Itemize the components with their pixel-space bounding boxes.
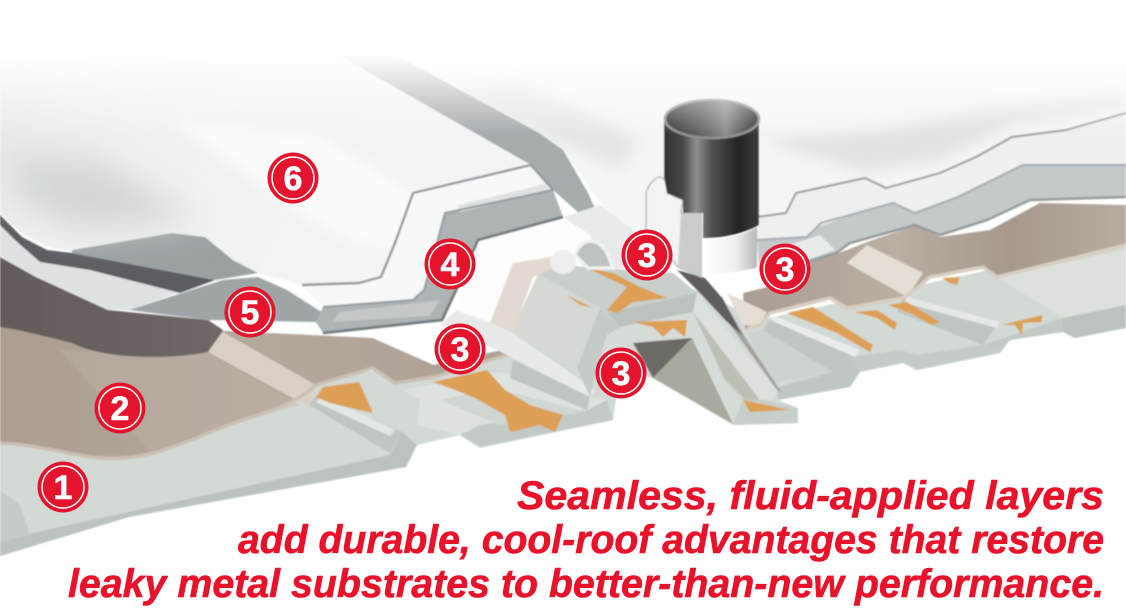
badge 1: 1 bbox=[54, 469, 72, 507]
pipe opening bbox=[665, 100, 759, 138]
badge 3, rib base: 3 bbox=[451, 331, 469, 369]
bolt fastener bbox=[550, 241, 613, 274]
badge 5 bbox=[224, 286, 276, 338]
badge 3, rib base bbox=[434, 324, 486, 374]
white ribbed block under coating bbox=[440, 217, 595, 397]
badge 6 bbox=[268, 152, 318, 204]
white collar bbox=[705, 227, 757, 277]
badge 3, pipe left bbox=[622, 230, 672, 280]
rust on the rib bbox=[567, 268, 790, 412]
central rib face and arch bbox=[513, 265, 798, 425]
right sheet of the coating: top coat bbox=[331, 20, 1126, 230]
badge 5: 5 bbox=[241, 294, 259, 332]
grey seam between sheets bbox=[277, 20, 617, 232]
right sheet: second and third coat bands bbox=[757, 113, 1126, 277]
left coating: dark stripe, lip and grey flaps bbox=[0, 215, 323, 322]
caption: leaky metal substrates to better-than-new performance. bbox=[68, 562, 1104, 606]
wedge beside seam bbox=[563, 205, 640, 272]
rust patches on corrugations bbox=[316, 277, 1042, 432]
badge 3, pipe right: 3 bbox=[776, 251, 794, 289]
badge 3, pipe left: 3 bbox=[638, 237, 656, 275]
white gap behind rib bbox=[373, 323, 470, 365]
caption: add durable, cool-roof advantages that restore bbox=[238, 518, 1104, 562]
badge 2: 2 bbox=[111, 390, 129, 428]
badge 6: 6 bbox=[284, 160, 302, 198]
pipe flashing bbox=[646, 177, 701, 277]
dark shadow under the coating bbox=[0, 257, 223, 357]
caption: Seamless, fluid-applied layers bbox=[517, 474, 1104, 518]
left sheet of the coating: top coat bbox=[0, 20, 531, 285]
pipe body bbox=[664, 119, 759, 238]
badge 2 bbox=[94, 382, 146, 434]
top fade to white bbox=[0, 0, 1126, 135]
caption bbox=[68, 474, 1104, 606]
vent pipe with flashing bbox=[646, 100, 775, 293]
brown base coat, right bbox=[727, 203, 1126, 330]
badge 1 bbox=[38, 462, 88, 512]
badge 4 bbox=[424, 238, 476, 290]
metal substrate base layer bbox=[0, 240, 1126, 556]
badge 3, arch bbox=[596, 348, 646, 398]
brown base coat, left bbox=[0, 320, 510, 458]
ribbed edge of left coating bbox=[302, 165, 563, 333]
badge 4: 4 bbox=[441, 246, 460, 284]
badge 3, pipe right bbox=[760, 244, 810, 294]
badge 3, arch: 3 bbox=[612, 355, 630, 393]
